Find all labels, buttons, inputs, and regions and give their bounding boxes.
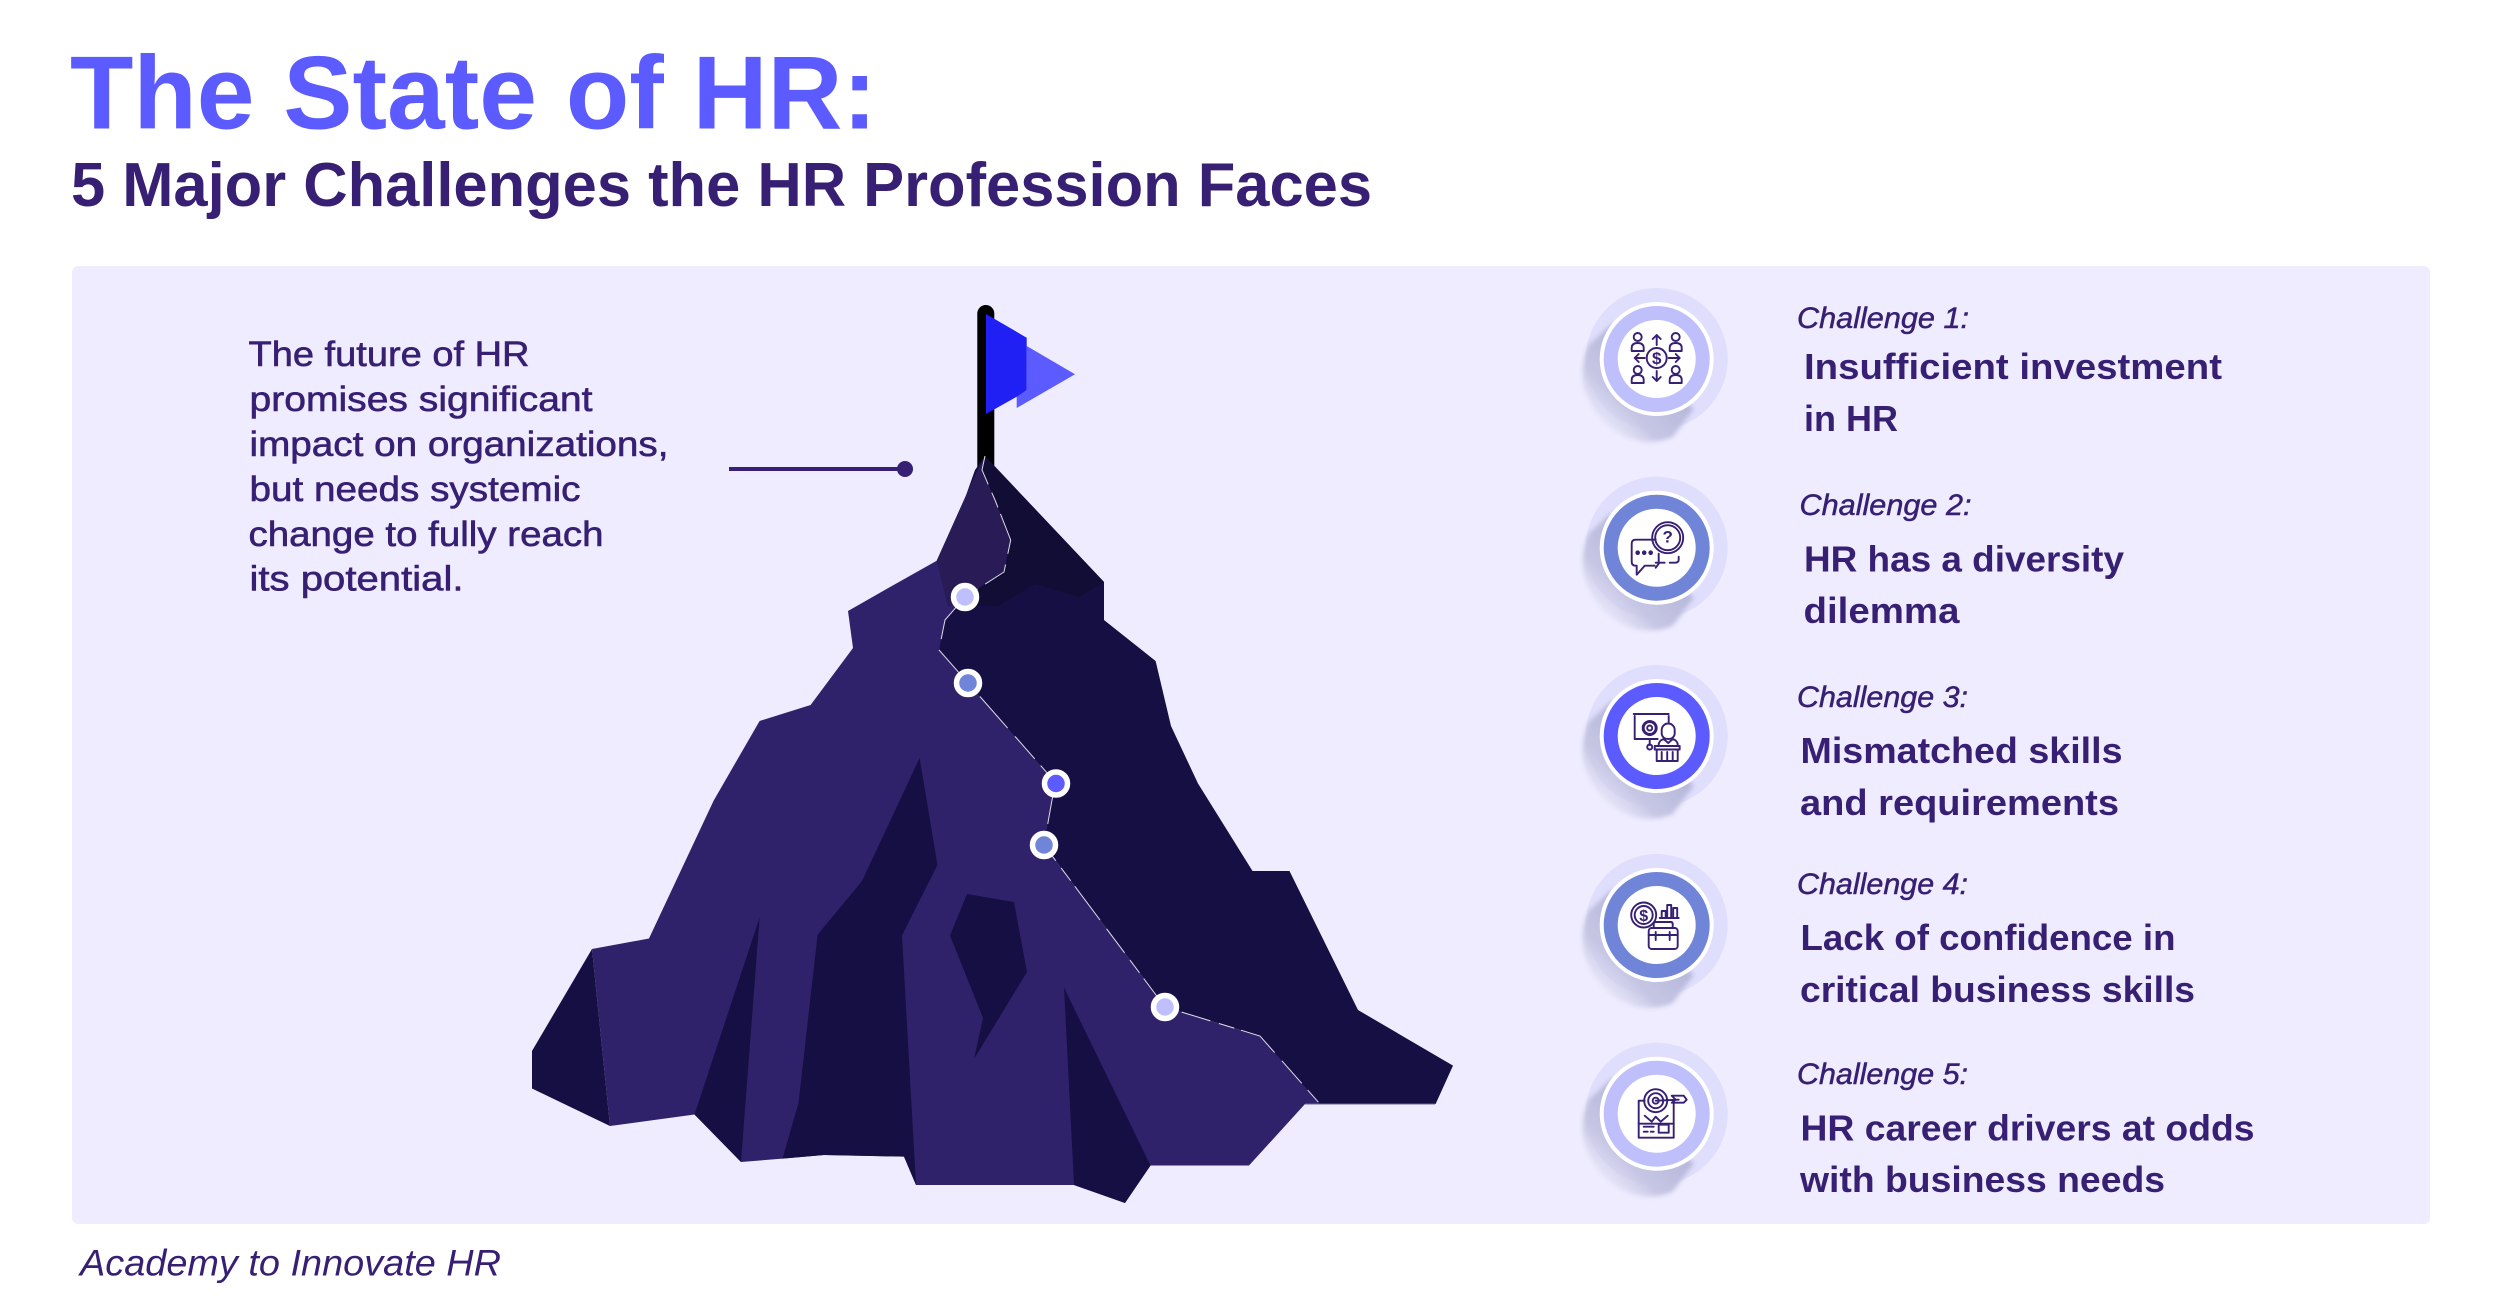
challenge 3 text: and requirements: [1800, 782, 2119, 823]
icon: flag on pole: [977, 305, 1075, 495]
trail: dashed route up the mountain: [939, 456, 1435, 1104]
icon: speech bubbles with question: ?: [1663, 528, 1673, 547]
challenge 2 text: [1800, 489, 2124, 631]
icon: coin, chart and briefcase: $: [1639, 908, 1648, 925]
icon badge: business skills: [1583, 854, 1728, 1008]
challenge 5 text: HR career drivers at odds: [1800, 1108, 2254, 1149]
challenge 5 text: [1797, 1058, 2254, 1200]
source credit: Academy to Innovate HR: [78, 1242, 501, 1284]
icon: presenter with gear board: [1634, 714, 1680, 761]
text block: intro statement: [248, 335, 668, 598]
challenge 3 text: Challenge 3:: [1797, 681, 1968, 714]
challenge 1 text: Insufficient investment: [1804, 346, 2222, 387]
icon: people around money: [1632, 333, 1682, 383]
icon badge: career drivers: [1583, 1043, 1728, 1197]
challenge 1 text: Challenge 1:: [1797, 302, 1969, 335]
icon badge: investment: [1583, 288, 1728, 442]
icon: people around money: $: [1652, 349, 1662, 368]
title: The State of HR:: [70, 36, 877, 152]
challenge 4 text: critical business skills: [1800, 969, 2195, 1010]
icon badge: skills mismatch: [1583, 665, 1728, 819]
challenge 3 text: Mismatched skills: [1800, 730, 2122, 771]
text block: intro statement: promises significant: [250, 380, 593, 419]
text block: intro statement: impact on organizations,: [250, 425, 668, 464]
challenge 4 text: Lack of confidence in: [1800, 917, 2176, 958]
panel: main background: [72, 266, 2430, 1224]
challenge 2 text: Challenge 2:: [1800, 489, 1972, 522]
text block: intro statement: change to fully reach: [248, 515, 604, 554]
challenge 1 text: in HR: [1804, 398, 1898, 439]
challenge 4 text: Challenge 4:: [1797, 868, 1968, 901]
challenge 5 text: with business needs: [1799, 1159, 2165, 1200]
icon badge: diversity dilemma: [1583, 477, 1728, 631]
icon: target and dart over document: [1639, 1089, 1687, 1138]
milestone markers: [954, 586, 1176, 1018]
text block: intro statement: its potential.: [250, 560, 464, 598]
text block: intro statement: The future of HR: [248, 335, 530, 374]
icon: speech bubbles with question: [1632, 522, 1683, 575]
challenge 2 text: HR has a diversity: [1804, 539, 2124, 580]
challenge 5 text: Challenge 5:: [1797, 1058, 1968, 1091]
subtitle: 5 Major Challenges the HR Profession Faces: [71, 151, 1372, 220]
chart: mountain illustration: [532, 456, 1453, 1203]
challenge 2 text: dilemma: [1804, 590, 1961, 631]
challenge 4 text: [1797, 868, 2195, 1010]
challenge 3 text: [1797, 681, 2122, 823]
text block: intro statement: but needs systemic: [250, 470, 580, 509]
callout connector line: [729, 461, 913, 477]
icon: coin, chart and briefcase: [1631, 902, 1679, 949]
challenge 1 text: [1797, 302, 2222, 439]
